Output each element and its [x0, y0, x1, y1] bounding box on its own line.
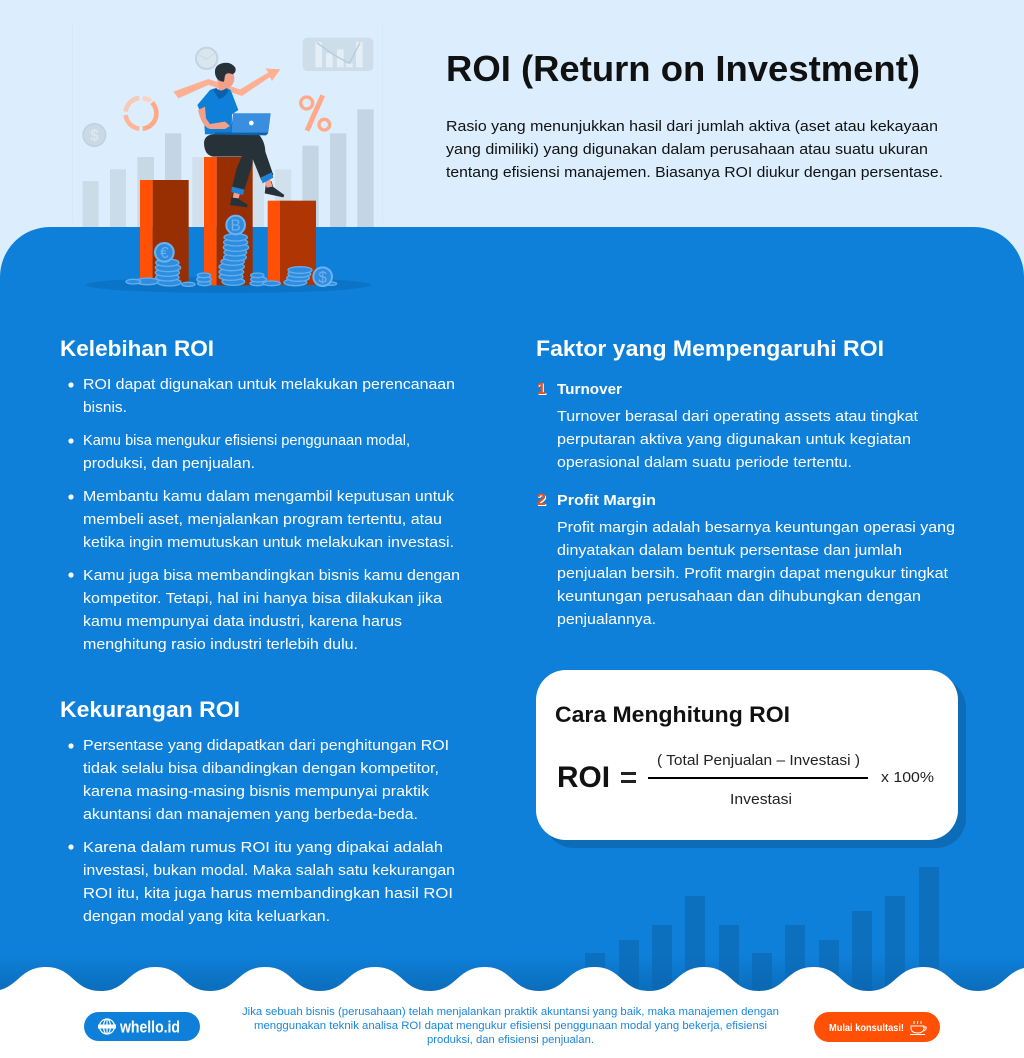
list: Kekurangan: tidak selalu bisa dibandingkan dengan kompetitor, [83, 760, 439, 777]
list: Kelebihan: Kamu bisa mengukur efisiensi penggunaan modal, [83, 432, 410, 449]
icon: growth arrow [173, 68, 280, 98]
footer note: produksi, dan efisiensi penjualan. [427, 1034, 594, 1046]
standing coins: € [160, 245, 169, 262]
list: Kekurangan: Karena dalam rumus ROI itu yang dipakai adalah [83, 839, 443, 856]
factor 1: Turnover: 1 [536, 379, 546, 398]
factor 1: Turnover: operasional dalam suatu periode tertentu. [557, 454, 852, 471]
list: Kelebihan: kamu mempunyai data industri, karena harus [83, 613, 402, 630]
list: Kekurangan: ROI itu, kita juga harus membandingkan hasil ROI [83, 885, 453, 902]
icon: coffee cup [910, 1021, 926, 1034]
list: Kelebihan: ROI dapat digunakan untuk melakukan perencanaan [83, 376, 455, 393]
icon: globe [98, 1019, 116, 1034]
heading: Kelebihan ROI: Kelebihan ROI [60, 336, 214, 361]
illustration: person on bars with coins [86, 157, 371, 293]
logo pill: whello.id [119, 1018, 180, 1036]
factor 2: Profit Margin [536, 490, 955, 628]
heading: Faktor: Faktor yang Mempengaruhi ROI [536, 336, 884, 361]
factor 1: Turnover: perputaran aktiva yang digunakan untuk kegiatan [557, 431, 911, 448]
list: Kekurangan: akuntansi dan manajemen yang berbeda-beda. [83, 806, 418, 823]
footer note [242, 1006, 779, 1046]
footer note: menggunakan teknik analisa ROI dapat mengukur efisiensi penggunaan modal yang bekerja, efisiensi [254, 1020, 767, 1032]
background bars bottom right [585, 867, 939, 998]
list: Kekurangan: dengan modal yang kita keluarkan. [83, 908, 330, 925]
factor 2: Profit Margin: Profit margin adalah besarnya keuntungan operasi yang [557, 519, 955, 536]
standing coins: B [231, 218, 241, 235]
icon: percent [301, 95, 330, 131]
list: Kelebihan: bisnis. [83, 399, 127, 416]
blue main panel [0, 227, 1024, 1058]
card: formula [536, 670, 966, 848]
factor 1: Turnover: Turnover [557, 382, 622, 398]
list: Kelebihan: Kamu juga bisa membandingkan bisnis kamu dengan [83, 567, 460, 584]
factor 2: Profit Margin: penjualan bersih. Profit margin dapat mengukur tingkat [557, 565, 949, 582]
list: Kelebihan: kompetitor. Tetapi, hal ini hanya bisa dilakukan jika [83, 590, 443, 607]
consult button: Mulai konsultasi! [829, 1022, 904, 1034]
card: formula: ( Total Penjualan – Investasi ) [657, 752, 860, 769]
card: formula: Cara Menghitung ROI [555, 702, 790, 727]
title: ROI (Return on Investment) [446, 48, 920, 89]
factor 2: Profit Margin: 2 [538, 491, 547, 510]
list: Kelebihan: produksi, dan penjualan. [83, 455, 255, 472]
factor 2: Profit Margin: penjualannya. [557, 611, 656, 628]
consult button [814, 1012, 940, 1042]
heading: Kekurangan ROI: Kekurangan ROI [60, 697, 240, 722]
footer wave [0, 967, 1024, 1058]
list: Kelebihan: ketika ingin memutuskan untuk melakukan investasi. [83, 534, 454, 551]
intro paragraph: Rasio yang menunjukkan hasil dari jumlah aktiva (aset atau kekayaan [446, 118, 938, 135]
factor 1: Turnover [536, 379, 919, 471]
card: formula: x 100% [881, 769, 934, 786]
list: Kelebihan: Membantu kamu dalam mengambil keputusan untuk [83, 488, 455, 505]
orange bars [140, 157, 316, 285]
standing coins [155, 216, 332, 286]
icon: mini chart [303, 38, 373, 71]
list: Kelebihan [68, 376, 460, 653]
intro paragraph: tentang efisiensi manajemen. Biasanya ROI diukur dengan persentase. [446, 164, 943, 181]
list: Kekurangan: karena masing-masing bisnis mempunyai praktik [83, 783, 430, 800]
intro paragraph: yang dimiliki) yang digunakan dalam perusahaan atau suatu ukuran [446, 141, 928, 158]
factor 1: Turnover: Turnover berasal dari operating assets atau tingkat [557, 408, 919, 425]
logo pill [84, 1012, 200, 1041]
icon: dollar coin: $ [90, 128, 99, 145]
card: formula: ROI [557, 761, 610, 794]
factor 2: Profit Margin: dinyatakan dalam bentuk persentase dan jumlah [557, 542, 902, 559]
icon: donut chart [126, 98, 156, 129]
factor 2: Profit Margin: 2 [536, 490, 546, 509]
card: formula: Investasi [730, 791, 792, 808]
standing coins: $ [318, 269, 327, 286]
coin stacks [126, 234, 337, 286]
person with laptop [197, 63, 284, 207]
list: Kekurangan: Persentase yang didapatkan dari penghitungan ROI [83, 737, 449, 754]
list: Kelebihan: membeli aset, menjalankan program tertentu, atau [83, 511, 442, 528]
footer note: Jika sebuah bisnis (perusahaan) telah menjalankan praktik akuntansi yang baik, maka manajemen dengan [242, 1006, 779, 1018]
icon: clock [196, 48, 217, 69]
factor 1: Turnover: 1 [538, 380, 547, 399]
background chart illustration [73, 23, 383, 231]
factor 2: Profit Margin: Profit Margin [557, 493, 656, 509]
list: Kekurangan [68, 737, 455, 925]
icon: dollar coin [83, 124, 106, 146]
laptop [215, 113, 271, 135]
list: Kekurangan: investasi, bukan modal. Maka salah satu kekurangan [83, 862, 455, 879]
factor 2: Profit Margin: keuntungan perusahaan dan dihubungkan dengan [557, 588, 921, 605]
intro paragraph [446, 118, 943, 181]
list: Kelebihan: menghitung rasio industri terlebih dulu. [83, 636, 358, 653]
